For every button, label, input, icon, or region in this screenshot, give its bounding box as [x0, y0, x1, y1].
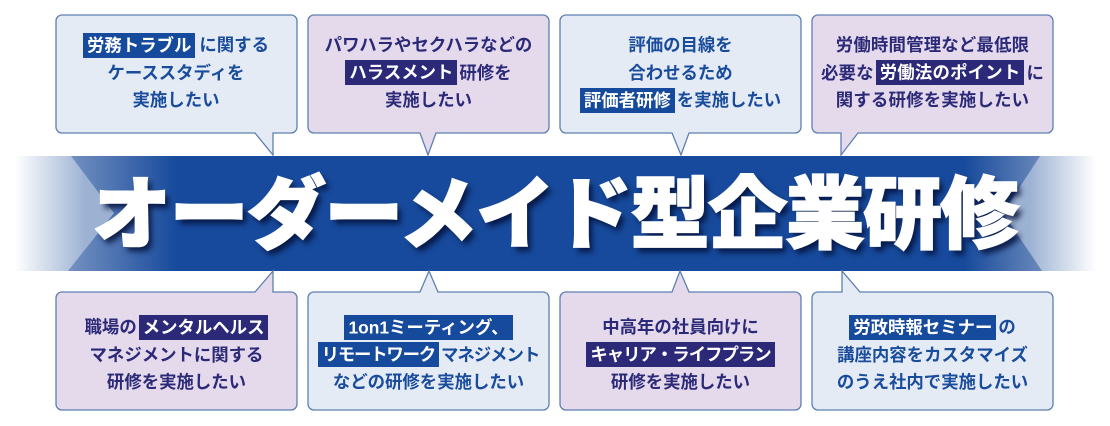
callout text — [325, 35, 532, 110]
callout text: 1on1ミーティング、 — [348, 317, 509, 337]
callout text: リモートワーク マネジメント — [322, 344, 539, 364]
callout text — [318, 315, 539, 392]
title banner — [21, 156, 1090, 271]
callout text — [83, 33, 269, 110]
callout text: のうえ社内で実施したい — [837, 372, 1028, 392]
callout text — [821, 35, 1044, 110]
callout: harassment training — [307, 14, 550, 156]
callout text: などの研修を実施したい — [333, 372, 524, 392]
callout text: 合わせるため — [628, 62, 733, 82]
callout text: 労働時間管理など最低限 — [836, 35, 1029, 55]
callout text: 評価者研修 を実施したい — [584, 90, 781, 110]
callout text: 研修を実施したい — [107, 372, 246, 392]
callout text: 労務トラブル に関する — [87, 35, 269, 55]
callout: seminar customisation — [811, 270, 1054, 411]
callout text: 関する研修を実施したい — [836, 90, 1029, 110]
heading: オーダーメイド型企業研修 — [92, 170, 1018, 259]
callout: career and life plan — [559, 270, 802, 411]
callout text — [84, 315, 268, 392]
callout text: 研修を実施したい — [611, 372, 750, 392]
callout text — [586, 317, 775, 392]
callout text — [837, 315, 1028, 392]
callout: evaluator training — [559, 14, 802, 156]
callout text: キャリア・ライフプラン — [590, 344, 771, 364]
callout text: 職場の メンタルヘルス — [85, 317, 264, 337]
callout: labour law points — [811, 14, 1054, 157]
callout text: マネジメントに関する — [90, 344, 263, 364]
callout text: 労政時報セミナー の — [853, 317, 1016, 337]
callout text: ハラスメント 研修を — [349, 62, 512, 82]
callout text: 中高年の社員向けに — [602, 317, 759, 337]
callout text: 実施したい — [133, 90, 219, 110]
callout text: ケーススタディを — [107, 62, 245, 82]
callout: labour trouble case study — [55, 14, 298, 157]
callout text: 必要な 労働法のポイント に — [821, 62, 1044, 82]
callout text: 評価の目線を — [628, 35, 733, 55]
callout: mental health management — [55, 270, 298, 411]
callout: 1on1 and remote work — [307, 270, 550, 411]
callout text: 実施したい — [385, 90, 472, 110]
callout text — [580, 35, 781, 113]
callout text: パワハラやセクハラなどの — [325, 35, 532, 55]
callout text: 講座内容をカスタマイズ — [837, 344, 1028, 364]
